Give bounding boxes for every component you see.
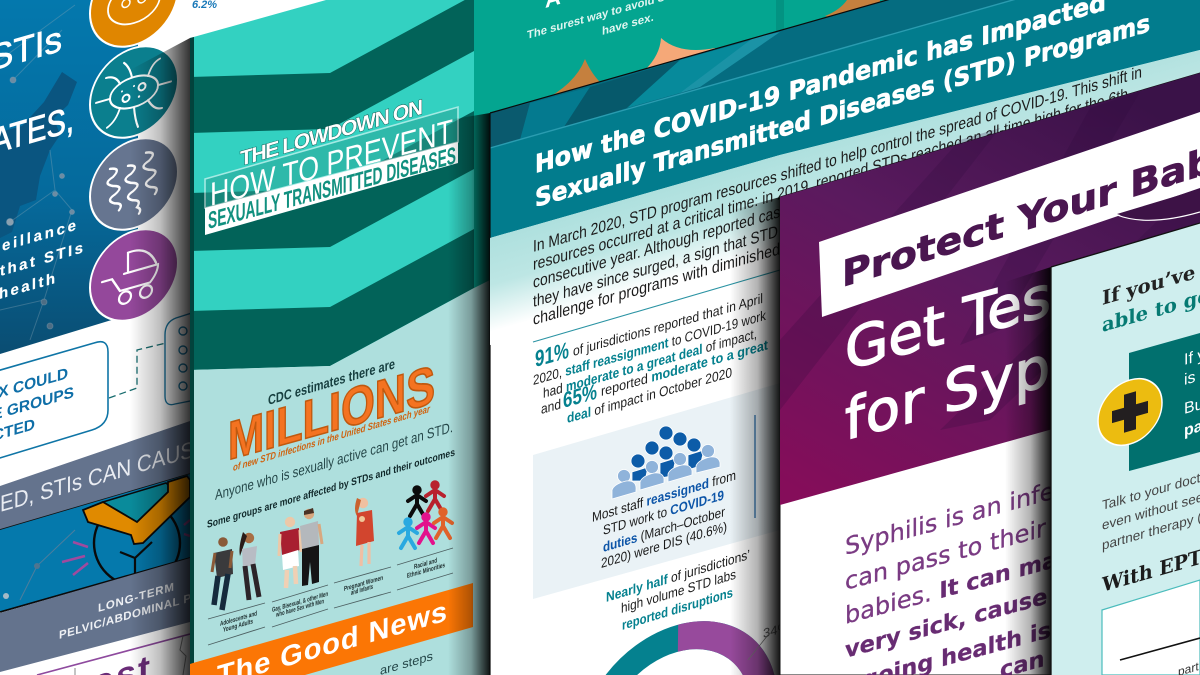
syphilis body copy: very sick, cause: [845, 584, 1047, 664]
staff caption: 2020) were DIS (40.6%): [601, 518, 727, 571]
group captions: [220, 557, 445, 634]
lab disruptions text: reported disruptions: [622, 584, 733, 633]
teal callout with text: [1129, 333, 1200, 471]
intro paragraph: challenge for programs with diminished: [533, 239, 780, 329]
dashed connector: [109, 343, 166, 398]
gray band heading: ED, STIs CAN CAUS: [0, 436, 194, 517]
heading: eillance: [2, 217, 76, 255]
intro paragraph: they have since surged, a sign that STD: [533, 222, 778, 311]
syphilis body copy: Syphilis is an infection: [845, 460, 1114, 561]
poster: COVID-19 impact on STD programs: [490, 0, 1200, 675]
91% staff reassignment stat: had moderate to a great deal of impact,: [543, 325, 757, 401]
staff caption: Most staff reassigned from: [592, 467, 736, 525]
statement: Anyone who is sexually active can get an STD.: [215, 420, 453, 504]
91% staff reassignment stat: 91%: [535, 337, 569, 372]
icon: purple stroller: [90, 218, 178, 332]
91% staff reassignment stat: 2020, staff reassignment to COVID-19 work: [533, 307, 767, 388]
staff caption: STD work to COVID-19: [603, 487, 724, 538]
poster: STI surveillance (left): [0, 0, 217, 675]
gray caption band: LONG-TERM: [98, 580, 175, 615]
gray caption band: PELVIC/ABDOMINAL P: [59, 592, 191, 642]
poster: expedited partner therapy: [1051, 223, 1200, 675]
main heading: Sexually Transmitted Diseases (STD) Programs: [535, 9, 1150, 214]
shadow cast by fifth poster: [1005, 267, 1051, 675]
purple header: [780, 73, 1200, 505]
map of eastern United States: [0, 72, 77, 238]
man in red shirt: [279, 517, 301, 588]
estimate lead-in: CDC estimates there are: [268, 356, 395, 409]
MILLIONS headline: MILLIONS: [228, 353, 435, 472]
poster: The Lowdown on how to prevent STDs: [190, 0, 904, 675]
group captions: Ethnic Minorities: [407, 562, 445, 580]
poster title: [205, 95, 458, 235]
syphilis body copy: [845, 460, 1138, 675]
groups subheading: Some groups are more affected by STDs and their outcomes: [207, 447, 455, 531]
people illustrations: [212, 481, 452, 610]
group captions: Adolescents and: [220, 610, 257, 628]
lab disruptions text: high volume STD labs: [621, 566, 736, 616]
group caption rules: [208, 548, 453, 645]
teal callout with text: is: [1184, 368, 1196, 389]
header band: [490, 0, 1200, 238]
icon: yellow plus: [1098, 371, 1162, 453]
header diagonal streaks: [780, 92, 1200, 430]
man in black shirt: [212, 537, 233, 610]
racial and ethnic minorities chain: [399, 481, 452, 548]
poster title: SEXUALLY TRANSMITTED DISEASES: [208, 142, 456, 235]
group captions: and Infants: [351, 584, 373, 597]
man in gray shirt: [300, 508, 322, 586]
staff caption: duties (March–October: [603, 503, 725, 555]
white partner box: [1102, 580, 1200, 675]
heading: [0, 18, 83, 303]
poster title: THE LOWDOWN ON: [240, 95, 423, 171]
heading: health: [0, 270, 55, 303]
gray caption band: [0, 558, 191, 672]
91% staff reassignment stat: and: [541, 396, 561, 417]
pregnant woman in red dress: [355, 498, 374, 566]
donut label 34%: [748, 619, 789, 660]
pale blue staff panel: [533, 383, 780, 599]
91% staff reassignment stat: [533, 290, 768, 426]
shadow cast by fourth poster: [730, 197, 780, 675]
donut chart: [590, 614, 764, 675]
icon: teal germ: [90, 35, 178, 149]
doctor advice text: [1102, 467, 1200, 553]
91% staff reassignment stat: of jurisdictions reported that in April: [573, 290, 763, 359]
poster title: HOW TO PREVENT: [210, 113, 453, 214]
lab disruptions text: Nearly half of jurisdictions’: [606, 546, 750, 605]
syphilis body copy: babies. It can make: [845, 536, 1087, 630]
large heading: for Syphilis: [845, 302, 1167, 454]
blue band with pain icon: [0, 474, 190, 612]
group captions: Gay, Bisexual, & other Men: [272, 591, 328, 614]
pale lower panel: [190, 280, 490, 675]
divider: [754, 415, 756, 518]
icon: group of staff: [612, 426, 720, 499]
91% staff reassignment stat: 65%: [563, 379, 597, 413]
side box with dots: [165, 312, 195, 405]
91% staff reassignment stat: reported moderate to a great: [601, 336, 768, 399]
91% staff reassignment stat: deal of impact in October 2020: [567, 364, 732, 426]
staff caption: [592, 467, 736, 571]
title text: Protect Your Baby: [842, 130, 1200, 296]
arc under title strip: [1117, 189, 1200, 220]
heading: that STIs: [0, 240, 83, 280]
callout box with blue text: [0, 342, 108, 461]
poster: Protect Your Baby, syphilis: [780, 73, 1200, 675]
large heading: Get Tested: [845, 239, 1143, 384]
blue header panel: [0, 0, 138, 354]
shadow cast by third poster: [448, 113, 490, 675]
chevron stripes: [190, 0, 474, 370]
top ribbon wedges: [490, 0, 1200, 675]
icon: orange circle: [90, 0, 178, 58]
pale gradient intro panel: [490, 50, 1200, 345]
woman in gray top: [239, 532, 259, 600]
green panel with abstinence text: have sex.: [602, 11, 654, 38]
MILLIONS subtitle: of new STD infections in the United States each year: [233, 404, 431, 474]
lab disruptions text: [606, 546, 750, 633]
group captions: Racial and: [414, 557, 437, 571]
green panel with abstinence text: [474, 0, 904, 300]
syphilis body copy: can pass to their unborn: [845, 488, 1138, 596]
network lines: [0, 5, 75, 340]
group captions: who have Sex with Men: [275, 598, 324, 619]
group captions: Pregnant Women: [344, 575, 383, 593]
icon: gray squiggles: [90, 127, 178, 241]
group captions: Young Adults: [223, 618, 253, 634]
intro paragraph: consecutive year. Although reported cases: [533, 198, 795, 292]
white title strip: [819, 112, 1200, 317]
donut label 34%: 34%: [763, 619, 789, 641]
lower text strip: [37, 634, 190, 675]
shadow cast by second poster: [130, 38, 190, 675]
